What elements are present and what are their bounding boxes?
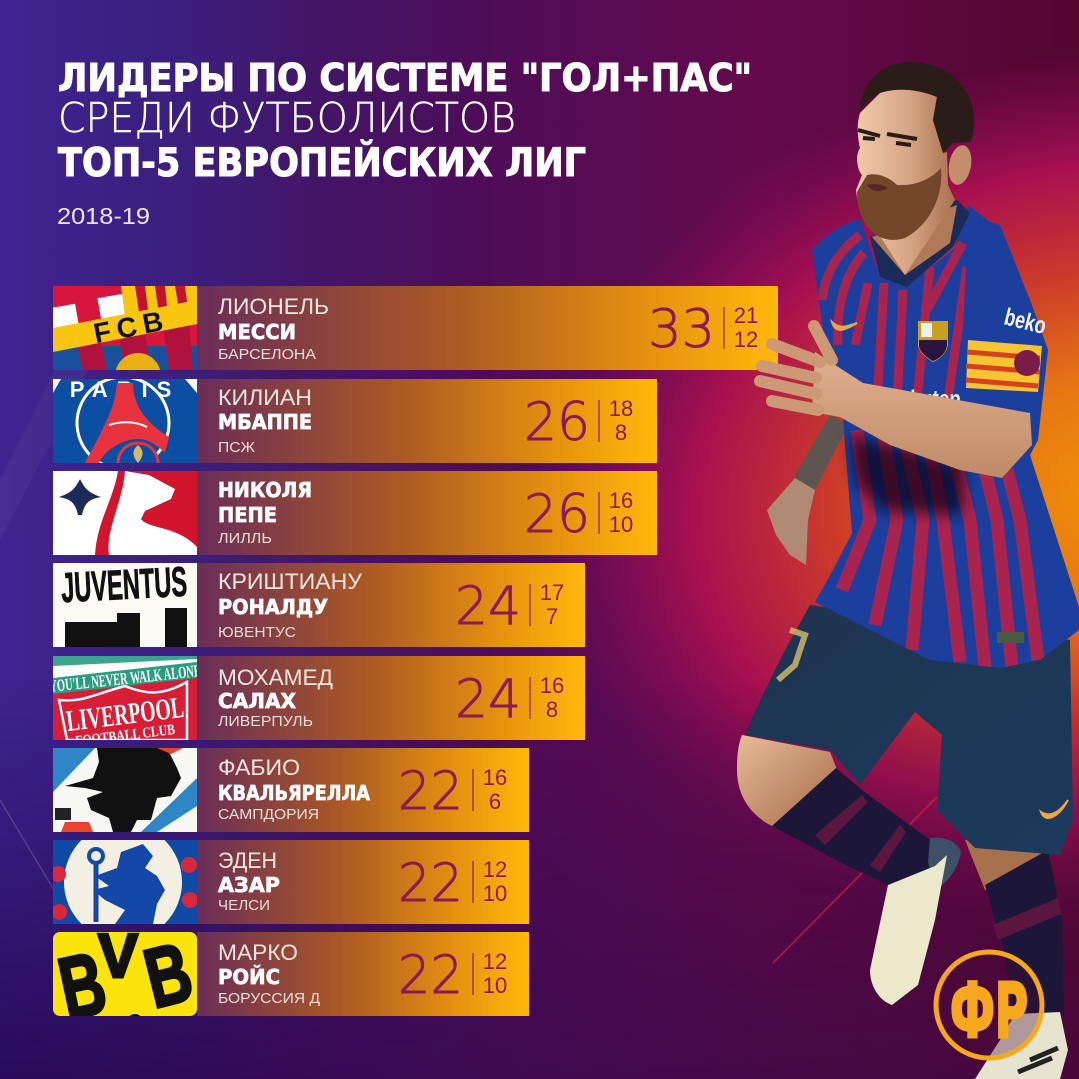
score: 12 [483, 857, 507, 882]
shorts swoosh [1041, 800, 1068, 818]
player name: МАРКО [218, 940, 298, 965]
logo: Barcelona: F C B [91, 305, 166, 349]
row: Salah [48, 656, 585, 750]
beard [857, 168, 941, 240]
player name: МОХАМЕД [218, 665, 333, 690]
head [856, 62, 974, 275]
player name: ЛИВЕРПУЛЬ [218, 713, 313, 730]
score: 16 [540, 673, 564, 698]
shorts [745, 605, 1073, 855]
logo: Dortmund: B [51, 932, 114, 1038]
player name: ПЕПЕ [218, 503, 277, 527]
logo: Liverpool [48, 656, 202, 750]
player name: БОРУССИЯ Д [218, 990, 320, 1007]
logo: Dortmund: V [98, 922, 138, 991]
score [398, 853, 507, 914]
logo: Lille [53, 471, 197, 555]
row: Reus [51, 922, 529, 1038]
number on shorts [778, 630, 805, 680]
score: 8 [546, 697, 558, 722]
score: 12 [734, 327, 758, 352]
score [455, 576, 564, 637]
player name [218, 294, 329, 363]
player name [218, 755, 370, 823]
score: 10 [609, 512, 633, 537]
score: 6 [489, 789, 501, 814]
player name: ПСЖ [218, 439, 255, 456]
player name [218, 478, 312, 547]
player name: РОЙС [218, 965, 280, 989]
player name: КРИШТИАНУ [218, 569, 363, 594]
score: 33 [648, 299, 715, 360]
mouth [867, 184, 888, 191]
player name: МЕССИ [218, 320, 296, 344]
score: 12 [483, 949, 507, 974]
player name: САМПДОРИЯ [218, 806, 319, 823]
player name [218, 385, 312, 456]
captain armband [966, 340, 1042, 392]
score [524, 484, 633, 545]
player name: ЛИОНЕЛЬ [218, 294, 329, 319]
score: 10 [483, 881, 507, 906]
player name: КВАЛЬЯРЕЛЛА [218, 781, 370, 805]
logo: Sampdoria [53, 748, 197, 832]
score: 17 [540, 580, 564, 605]
player name: ЮВЕНТУС [218, 624, 296, 641]
player name [218, 940, 320, 1007]
row: Pepe [53, 471, 657, 555]
score [398, 945, 507, 1006]
score: 16 [483, 765, 507, 790]
jersey tag [997, 632, 1024, 643]
score [455, 669, 564, 730]
player name: РОНАЛДУ [218, 595, 328, 619]
score: 8 [615, 420, 627, 445]
player name: ЧЕЛСИ [218, 897, 270, 914]
player illustration [737, 62, 1079, 1079]
club crest on jersey [918, 321, 948, 362]
score: 21 [734, 303, 758, 328]
player name: АЗАР [218, 873, 280, 897]
logo: Juventus [53, 558, 197, 647]
player name: САЛАХ [218, 689, 297, 713]
score: 7 [546, 604, 558, 629]
player name [218, 569, 363, 641]
title: ЛИДЕРЫ ПО СИСТЕМЕ "ГОЛ+ПАС" [58, 56, 752, 100]
score: 22 [398, 761, 463, 822]
player name: ЛИЛЛЬ [218, 530, 272, 547]
eyes and brows [858, 130, 917, 145]
right leg [965, 840, 1068, 1079]
score: 26 [524, 484, 590, 545]
score: 16 [609, 488, 633, 513]
player name: БАРСЕЛОНА [218, 346, 316, 363]
score: 22 [398, 853, 463, 914]
logo: PSG [53, 377, 197, 463]
logo: Dortmund [51, 922, 201, 1038]
row: Quagliarella [53, 748, 529, 832]
logo: FP badge [936, 952, 1042, 1058]
player name: ФАБИО [218, 755, 300, 780]
player name: ЭДЕН [218, 848, 277, 873]
logo: Liverpool: FOOTBALL CLUB [75, 722, 176, 750]
logo: PSG: PARIS [70, 377, 180, 402]
score [398, 761, 507, 822]
logo: Barcelona [53, 286, 197, 370]
jersey [812, 200, 1079, 668]
player name: МБАППЕ [218, 410, 312, 434]
score: 18 [609, 396, 633, 421]
row: Ronaldo [53, 558, 585, 647]
sponsor: chest: Rakuten [886, 386, 961, 413]
sponsor: sleeve: beko [1002, 304, 1049, 340]
player name: НИКОЛЯ [218, 478, 312, 502]
score: 24 [455, 576, 521, 637]
score: 26 [524, 392, 590, 453]
hanging arm [767, 415, 848, 565]
hair [860, 62, 974, 153]
player name [218, 848, 280, 914]
row: Hazard [50, 823, 529, 941]
logo: Chelsea [53, 840, 197, 924]
score [524, 392, 633, 453]
left leg [737, 735, 961, 1005]
title: ТОП-5 ЕВРОПЕЙСКИХ ЛИГ [58, 139, 586, 186]
score: 22 [398, 945, 463, 1006]
nike swoosh on jersey [832, 322, 857, 330]
title: СРЕДИ ФУТБОЛИСТОВ [58, 94, 516, 142]
score [648, 299, 758, 360]
player name: КИЛИАН [218, 385, 312, 410]
player name [218, 665, 333, 730]
title [58, 56, 752, 186]
season label: 2018-19 [57, 203, 150, 229]
row: Messi [48, 286, 778, 399]
forearm and hand [760, 326, 1032, 478]
score: 10 [483, 973, 507, 998]
score: 24 [455, 669, 521, 730]
row: Mbappe [37, 337, 657, 509]
logo: FP badge: ФР [950, 966, 1028, 1055]
